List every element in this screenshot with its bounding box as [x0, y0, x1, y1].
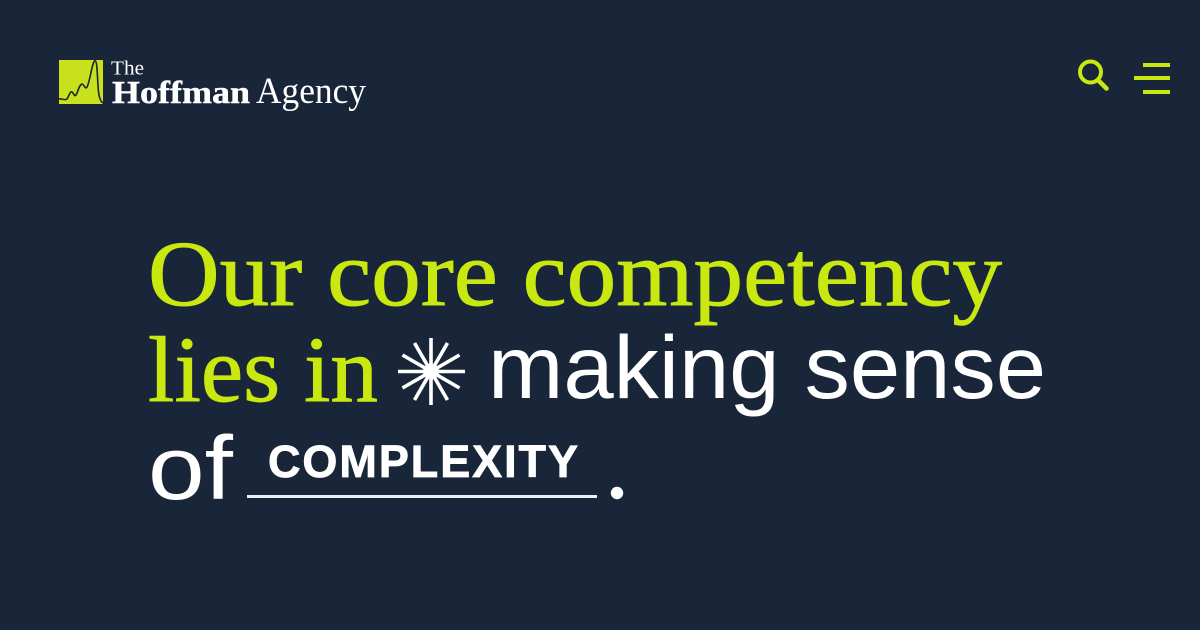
icon: logo chart square — [59, 60, 103, 104]
icon: search — [1080, 62, 1106, 88]
heading line 2: making sense: making sense — [488, 317, 1046, 417]
icon: menu — [1134, 63, 1170, 94]
period — [611, 487, 623, 499]
logo text: Hoffman: Hoffman — [112, 74, 250, 110]
heading line 2: lies in: lies in — [148, 319, 378, 422]
heading line 3: of: of — [148, 419, 234, 519]
blank underline — [247, 495, 597, 498]
logo text: The: The — [111, 58, 144, 80]
animated word: COMPLEXITY: COMPLEXITY — [268, 436, 578, 487]
heading line 1: Our core competency — [148, 223, 1003, 326]
logo text: Agency: Agency — [256, 71, 366, 112]
logo: The Hoffman Agency — [59, 58, 366, 112]
icon: starburst — [398, 338, 465, 405]
